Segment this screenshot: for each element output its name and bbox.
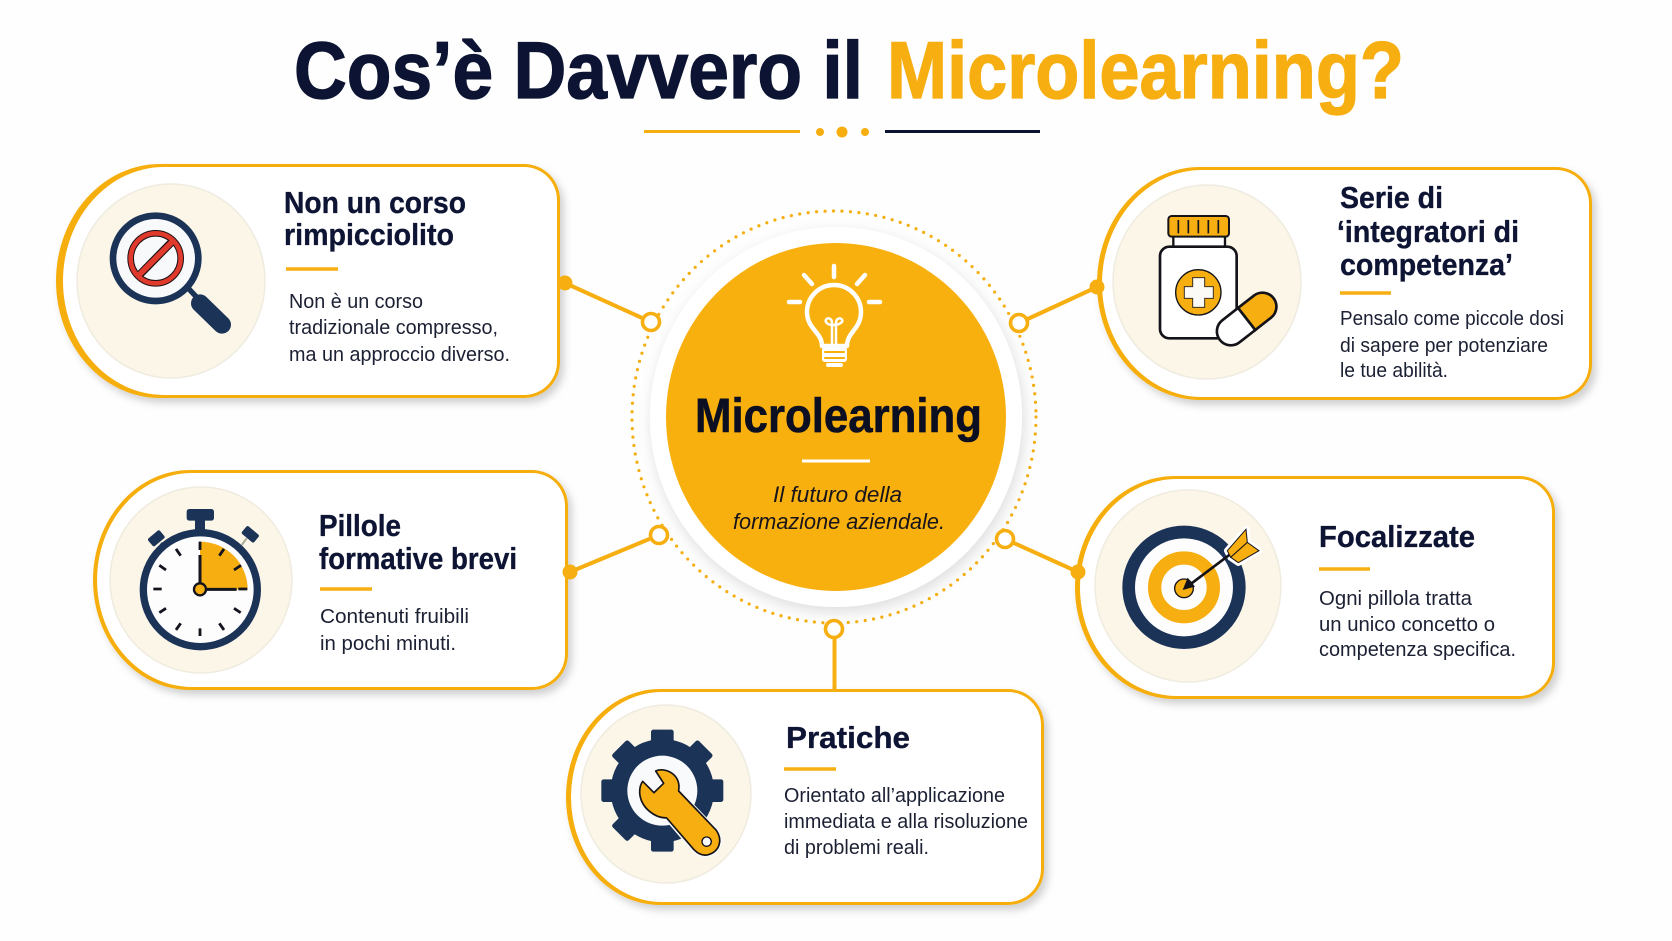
heading: Focalizzate: [1319, 519, 1475, 554]
body text: Contenuti fruibili: [320, 605, 469, 628]
body text: Non è un corso: [289, 290, 423, 313]
heading: competenza’: [1340, 247, 1513, 282]
panel: Serie di integratori di competenza: [1090, 167, 1592, 400]
connector: card 4 to hub: [1005, 539, 1078, 572]
title: Cos’è Davvero il: [294, 26, 863, 116]
hub tagline: Il futuro della: [773, 482, 902, 507]
heading: formative brevi: [319, 541, 517, 576]
card shape: [56, 164, 560, 398]
hub tagline: formazione aziendale.: [733, 509, 945, 534]
body text: un unico concetto o: [1319, 613, 1495, 636]
panel: Pratiche: [566, 689, 1044, 905]
heading underline: [320, 587, 372, 591]
heading: ‘integratori di: [1337, 214, 1519, 249]
card shape: [1097, 167, 1592, 400]
heading: [284, 185, 466, 252]
body text: [784, 784, 1028, 859]
icon background: [110, 487, 292, 673]
card shape: [93, 470, 568, 690]
title: Microlearning?: [887, 26, 1404, 116]
body text: in pochi minuti.: [320, 632, 456, 655]
heading underline: [286, 267, 338, 271]
hub heading: Microlearning: [695, 390, 982, 443]
panel: Focalizzate: [1070, 476, 1555, 699]
body text: Ogni pillola tratta: [1319, 587, 1473, 610]
body text: [320, 605, 469, 655]
hub white ring: [650, 227, 1022, 607]
connector: card 5 to hub: [832, 629, 836, 690]
heading underline: [784, 767, 836, 771]
panel: Non un corso rimpicciolito: [56, 164, 572, 398]
icon: target with arrow: [1129, 529, 1259, 643]
body text: immediata e alla risoluzione: [784, 810, 1028, 833]
body text: le tue abilità.: [1340, 359, 1448, 382]
connector: card 1 to hub: [565, 283, 651, 322]
panel: Pillole formative brevi: [93, 470, 578, 690]
heading: Pratiche: [786, 720, 910, 755]
connector: card 2 to hub: [1019, 287, 1097, 323]
icon: gear and wrench: [601, 730, 723, 855]
body text: Orientato all’applicazione: [784, 784, 1005, 807]
icon background: [1095, 490, 1281, 682]
card shape: [566, 689, 1044, 905]
title: [294, 26, 1404, 116]
body text: [1319, 587, 1516, 661]
body text: di sapere per potenziare: [1340, 334, 1548, 357]
connector: card 3 to hub: [570, 535, 659, 572]
body text: ma un approccio diverso.: [289, 343, 510, 366]
body text: tradizionale compresso,: [289, 316, 498, 339]
body text: [289, 290, 510, 366]
connector dot: [1070, 564, 1086, 580]
heading: Non un corso: [284, 185, 466, 220]
dotted orbit ring: [632, 211, 1036, 623]
heading: Serie di: [1340, 180, 1443, 215]
icon: supplement bottle and capsule: [1160, 216, 1282, 351]
hub tagline: [733, 482, 945, 534]
connector dot: [558, 276, 572, 290]
heading: Pillole: [319, 508, 401, 543]
heading underline: [1340, 291, 1391, 295]
heading: rimpicciolito: [284, 217, 454, 252]
title divider: [644, 126, 1040, 138]
body text: competenza specifica.: [1319, 638, 1516, 661]
icon background: [1113, 185, 1301, 379]
icon: magnifying glass with prohibition sign: [113, 216, 222, 325]
icon background: [77, 184, 265, 378]
hub divider: [802, 460, 870, 462]
icon background: [581, 705, 751, 883]
central hub: [650, 227, 1022, 607]
connector nodes on hub: [642, 314, 1028, 638]
card shape: [1075, 476, 1555, 699]
hub yellow disc: [666, 243, 1006, 591]
connector dot: [562, 564, 578, 580]
heading: [1337, 180, 1519, 282]
body text: [1340, 307, 1564, 382]
heading: [319, 508, 517, 576]
body text: di problemi reali.: [784, 836, 929, 859]
body text: Pensalo come piccole dosi: [1340, 307, 1564, 330]
heading underline: [1319, 567, 1370, 571]
icon: light bulb: [789, 266, 880, 365]
connector dot: [1090, 280, 1104, 294]
icon: stopwatch: [143, 509, 260, 647]
